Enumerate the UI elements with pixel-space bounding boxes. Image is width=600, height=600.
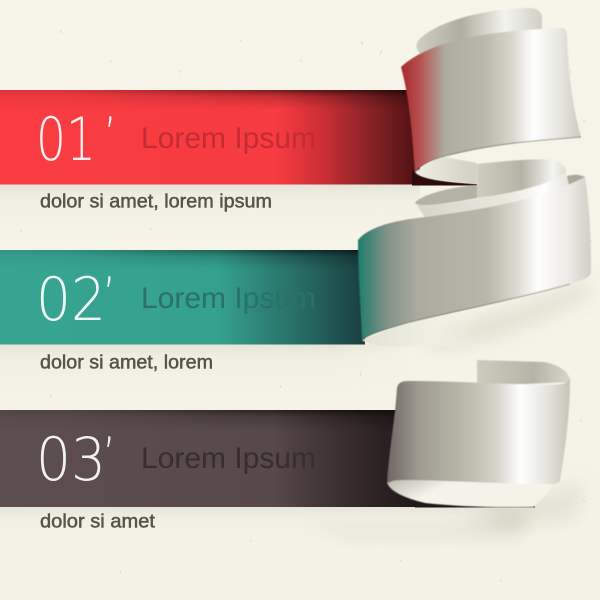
- ribbon 2 soft shadow: [430, 280, 590, 350]
- ribbon 2 inner band: [417, 172, 570, 218]
- ribbon 2: [358, 159, 591, 350]
- number 03: 03: [36, 425, 106, 495]
- ribbon 1 underside: [415, 156, 477, 184]
- ribbon 3: [387, 360, 585, 525]
- band 3 shadow: [300, 510, 530, 535]
- ribbon 3 back coil: [477, 360, 570, 386]
- ribbon 1 front: [401, 28, 581, 172]
- ribbon 3 front: [387, 378, 570, 484]
- ribbon 1 back coil: [416, 8, 542, 54]
- ribbon 2 inner wedge: [562, 175, 586, 192]
- prime mark 01: ’: [103, 107, 118, 161]
- label Lorem Ipsum 1: Lorem Ipsum: [141, 122, 316, 155]
- label Lorem Ipsum 3: Lorem Ipsum: [141, 442, 316, 475]
- ribbon 2 underside: [362, 305, 480, 347]
- band 2: teal: [0, 250, 372, 354]
- ribbon 1: [401, 8, 581, 184]
- prime mark 02: ’: [102, 267, 117, 321]
- prime mark 03: ’: [102, 427, 117, 481]
- ribbon 2 front: [358, 177, 591, 340]
- number 01: 01: [36, 105, 96, 175]
- ribbon 3 underside: [387, 478, 553, 507]
- band 1: red: [0, 90, 477, 196]
- ribbon 3 soft shadow: [480, 480, 585, 525]
- ribbon 1 lower edge: [415, 137, 581, 172]
- number 02: 02: [36, 265, 106, 335]
- ribbon 2 back coil left: [415, 185, 477, 205]
- subtitle 2: dolor si amet, lorem: [40, 352, 213, 374]
- ribbon 2 lower edge: [362, 284, 570, 340]
- subtitle 1: dolor si amet, lorem ipsum: [40, 190, 272, 212]
- band 3: dark: [0, 410, 535, 540]
- ribbon 2 back coil right: [477, 159, 566, 198]
- subtitle 3: dolor si amet: [40, 510, 156, 532]
- label Lorem Ipsum 2: Lorem Ipsum: [141, 282, 316, 315]
